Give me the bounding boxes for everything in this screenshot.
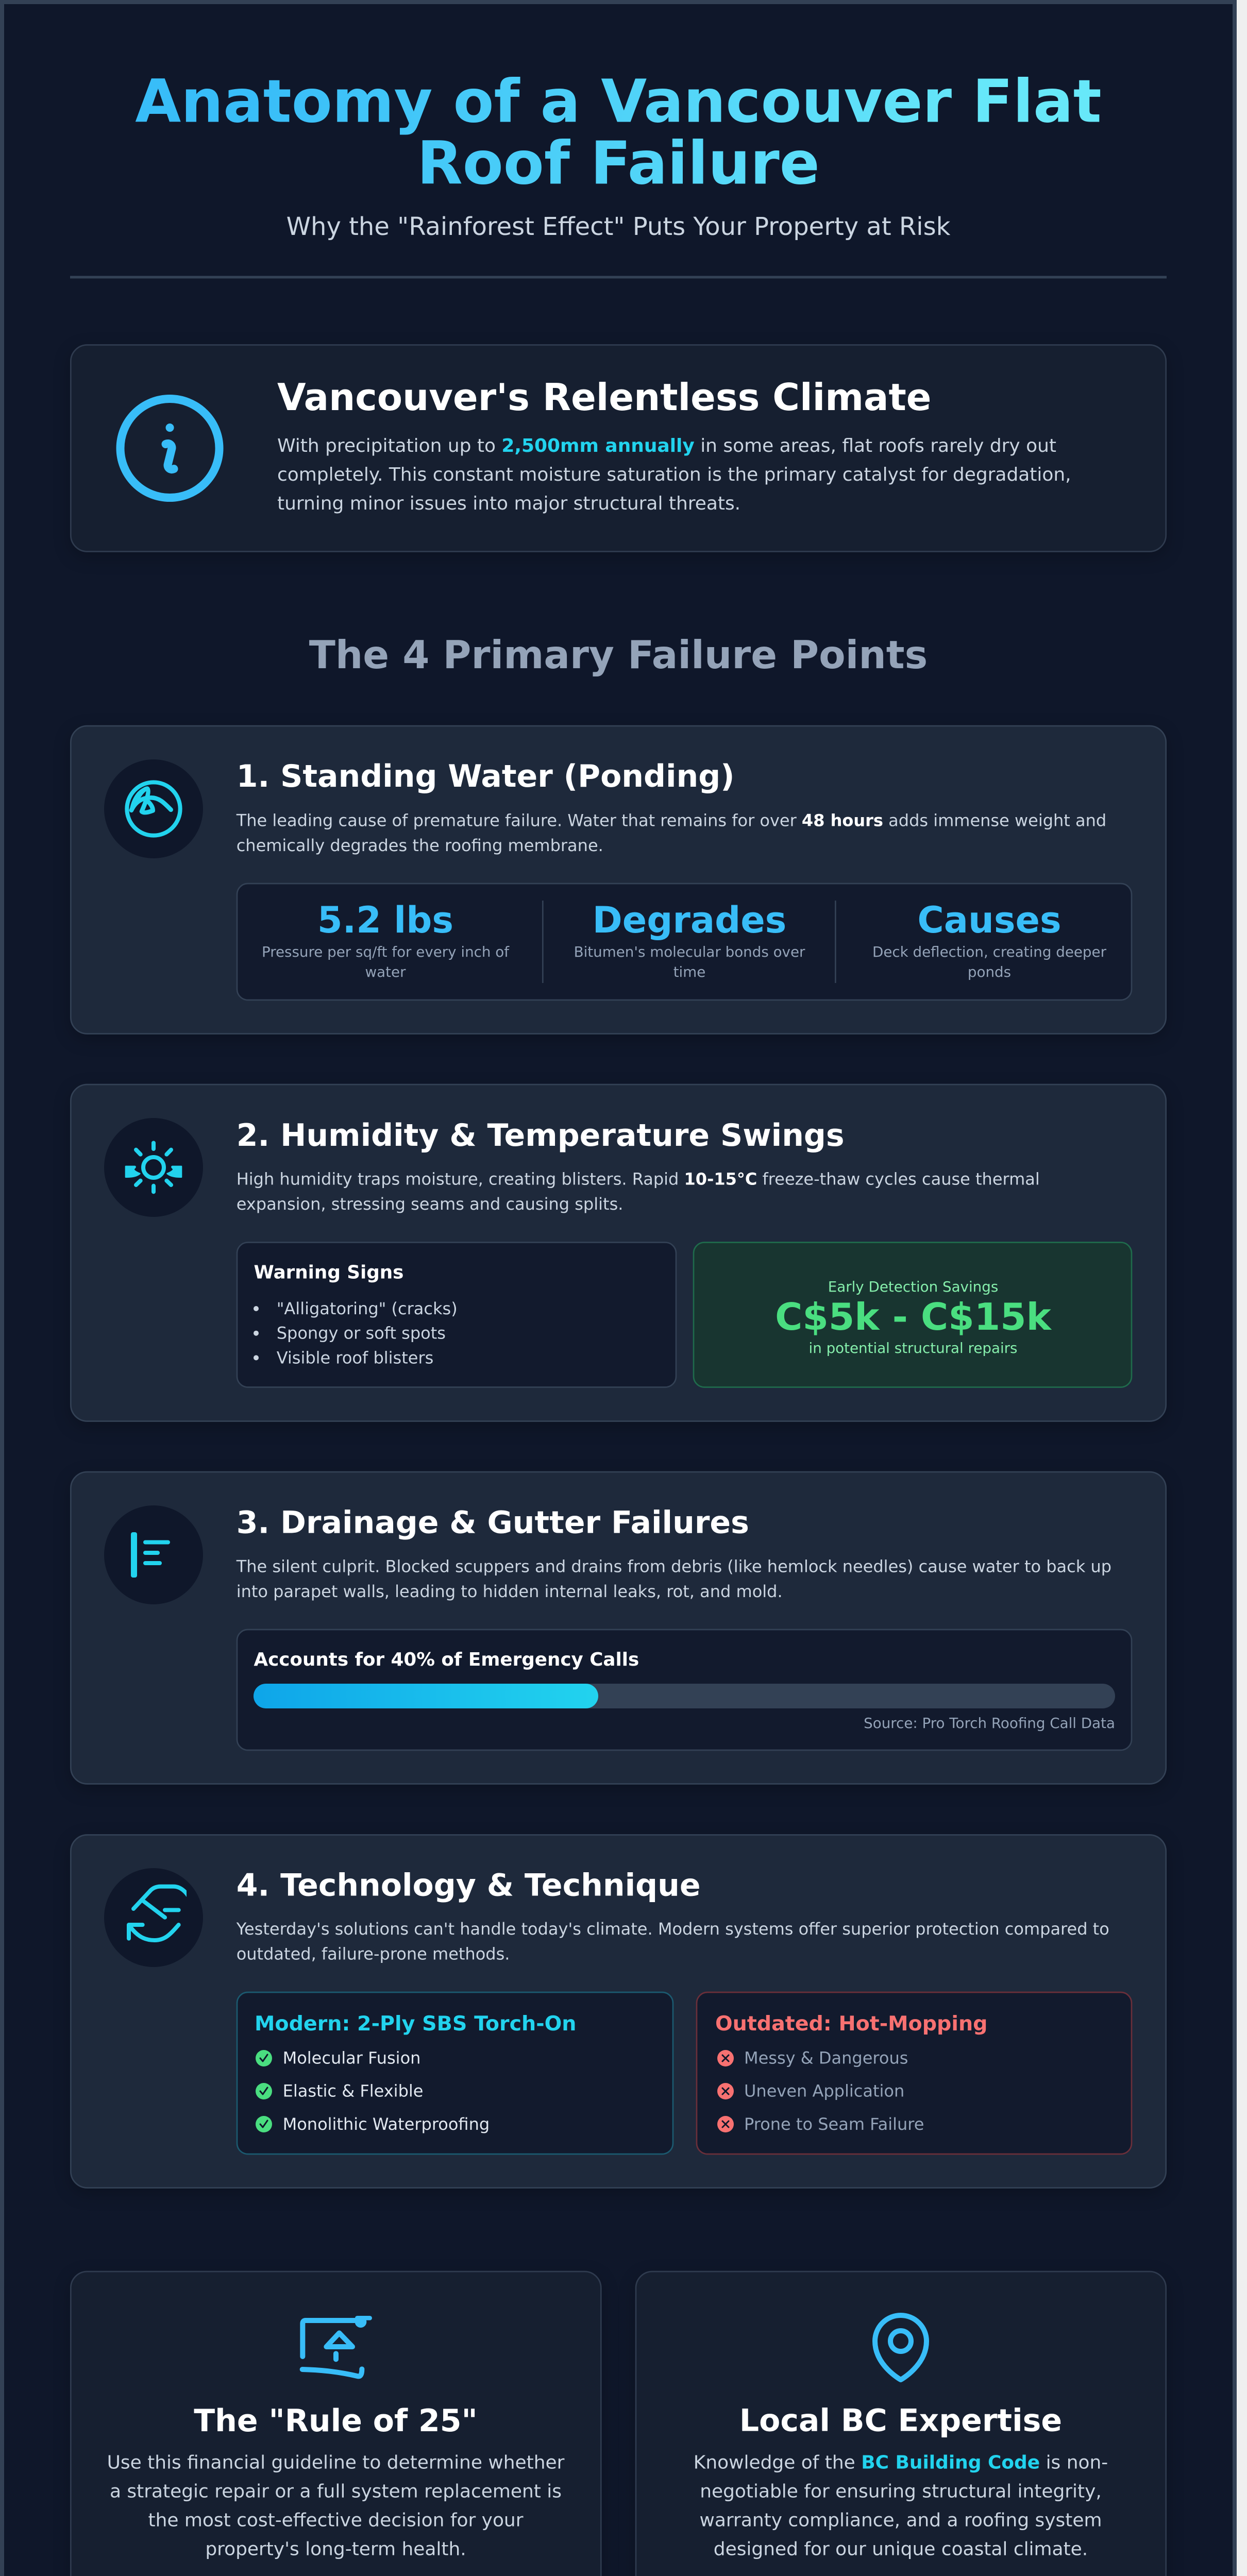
icon: info (121, 399, 220, 498)
text: The silent culprit. Blocked scuppers and drains from debris (like hemlock needles) cause water to back up (236, 1557, 1111, 1577)
icon: sun (104, 1118, 203, 1217)
text: Knowledge of the BC Building Code is non- (694, 2452, 1108, 2473)
modern box: Elastic & Flexible (283, 2081, 423, 2101)
progress box: Accounts for 40% of Emergency Calls (254, 1649, 639, 1670)
title: Anatomy of a Vancouver Flat (135, 67, 1102, 136)
stat 3: Causes (917, 899, 1061, 941)
savings box: in potential structural repairs (809, 1340, 1017, 1357)
heading: The "Rule of 25" (194, 2403, 478, 2439)
title: Roof Failure (417, 129, 820, 198)
stat 3 (872, 899, 1107, 980)
text: The leading cause of premature failure. Water that remains for over 48 hours adds immense weight and (237, 811, 1106, 831)
text: a strategic repair or a full system replacement is (110, 2481, 562, 2502)
panel: drainage (71, 1472, 1166, 1784)
modern box: Modern: 2-Ply SBS Torch-On (255, 2012, 576, 2036)
panel: humidity (71, 1084, 1166, 1421)
heading: Local BC Expertise (739, 2402, 1062, 2438)
stats box (237, 884, 1132, 1000)
text: property's long-term health. (205, 2539, 466, 2560)
text: negotiable for ensuring structural integrity, (700, 2481, 1102, 2502)
warning signs box: Warning Signs (254, 1262, 403, 1283)
savings box: C$5k - C$15k (775, 1296, 1052, 1339)
panel: standing water (71, 726, 1166, 1033)
subtitle: Why the "Rainforest Effect" Puts Your Property at Risk (287, 212, 951, 241)
panel: local expertise (636, 2272, 1166, 2576)
outdated box: Prone to Seam Failure (744, 2114, 924, 2134)
stat 1: water (365, 963, 406, 980)
text: chemically degrades the roofing membrane. (237, 836, 603, 855)
text: warranty compliance, and a roofing system (700, 2510, 1102, 2531)
heading: 2. Humidity & Temperature Swings (237, 1117, 845, 1154)
outdated box: Outdated: Hot-Mopping (715, 2012, 987, 2036)
text: Yesterday's solutions can't handle today's climate. Modern systems offer superior protection compared to (236, 1919, 1109, 1939)
climate text: turning minor issues into major structural threats. (277, 493, 740, 514)
stat 1 (262, 899, 510, 980)
stat 3: ponds (968, 963, 1011, 980)
heading: 1. Standing Water (Ponding) (237, 758, 735, 794)
progress box (237, 1630, 1132, 1750)
heading: 4. Technology & Technique (237, 1867, 701, 1903)
text: expansion, stressing seams and causing splits. (237, 1194, 623, 1214)
stat 1: 5.2 lbs (317, 899, 453, 941)
modern box: Molecular Fusion (283, 2048, 420, 2068)
icon: map pin (875, 2315, 926, 2380)
stat 2: time (673, 963, 705, 980)
warning signs box (237, 1243, 676, 1387)
modern box (237, 1992, 673, 2154)
stat 2 (574, 899, 805, 980)
section heading: The 4 Primary Failure Points (309, 632, 928, 677)
outdated box: Uneven Application (744, 2081, 904, 2101)
bar chart (254, 1684, 1115, 1708)
warning signs box: "Alligatoring" (cracks) (277, 1299, 458, 1318)
warning signs box: Spongy or soft spots (277, 1324, 446, 1343)
savings box: Early Detection Savings (828, 1278, 998, 1295)
title (135, 67, 1102, 198)
icon: droplet gauge (104, 759, 203, 858)
text: the most cost-effective decision for your (148, 2510, 524, 2531)
outdated box (697, 1992, 1132, 2154)
icon: swap arrows (104, 1868, 203, 1967)
climate text: With precipitation up to 2,500mm annually in some areas, flat roofs rarely dry out (277, 435, 1056, 456)
savings box (694, 1243, 1132, 1387)
text: outdated, failure-prone methods. (237, 1944, 510, 1963)
stat 2: Bitumen's molecular bonds over (574, 943, 805, 960)
text: into parapet walls, leading to hidden internal leaks, rot, and mold. (237, 1582, 783, 1601)
climate text: completely. This constant moisture saturation is the primary catalyst for degradation, (277, 464, 1071, 485)
icon: rule of 25 (302, 2316, 370, 2376)
outdated box: Messy & Dangerous (744, 2048, 908, 2068)
text: designed for our unique coastal climate. (714, 2539, 1088, 2560)
progress box: Source: Pro Torch Roofing Call Data (864, 1715, 1115, 1732)
stat 2: Degrades (593, 899, 786, 941)
panel: technology (71, 1835, 1166, 2188)
modern box: Monolithic Waterproofing (283, 2114, 490, 2134)
stat 1: Pressure per sq/ft for every inch of (262, 943, 510, 960)
warning signs box: Visible roof blisters (277, 1348, 433, 1367)
panel: climate (71, 345, 1166, 551)
heading: 3. Drainage & Gutter Failures (237, 1505, 749, 1541)
stat 3: Deck deflection, creating deeper (872, 943, 1107, 960)
panel: rule of 25 (71, 2272, 601, 2576)
text: High humidity traps moisture, creating blisters. Rapid 10-15°C freeze-thaw cycles cause thermal (237, 1170, 1040, 1189)
text: Use this financial guideline to determine whether (107, 2452, 565, 2473)
icon: drain bars (104, 1505, 203, 1604)
climate heading: Vancouver's Relentless Climate (277, 376, 932, 419)
